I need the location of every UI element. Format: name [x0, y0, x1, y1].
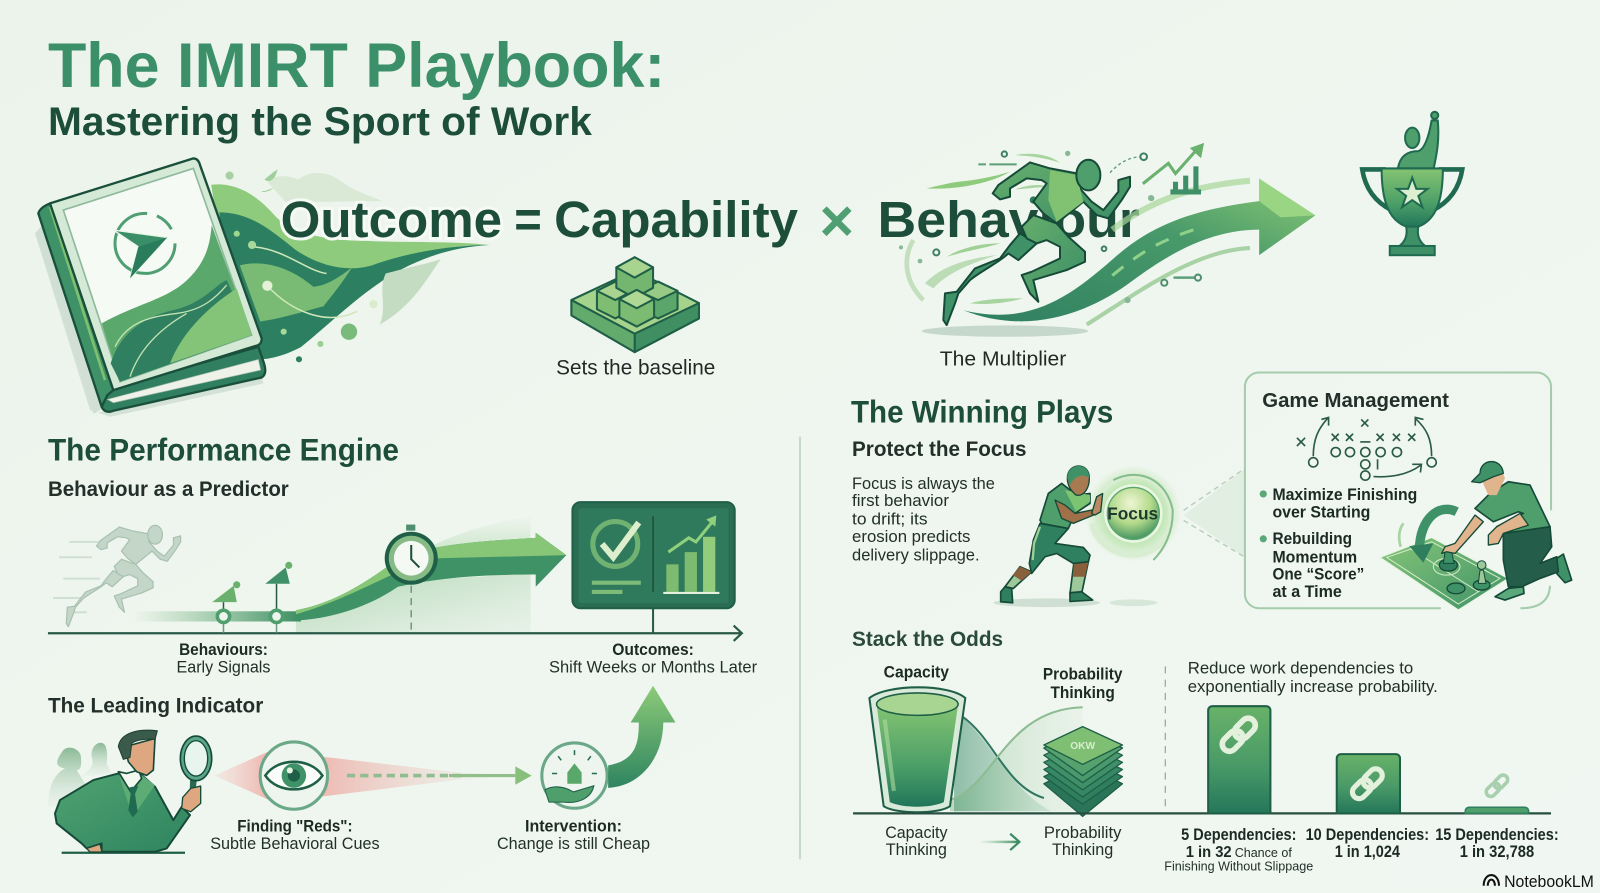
heading: Game Management	[1262, 390, 1449, 412]
results dashboard	[572, 502, 735, 633]
subheading: Behaviour as a Predictor	[48, 477, 289, 501]
arrow: thinking shift	[980, 834, 1019, 850]
label: 10 dependencies: 1 in 1,024	[1335, 843, 1400, 861]
formula: Capability	[554, 191, 799, 248]
label: behaviours: Early Signals	[177, 659, 270, 677]
book	[35, 158, 265, 417]
label: probability thinking: Thinking	[1051, 684, 1115, 702]
text: reduce dependencies: exponentially increase probability.	[1188, 677, 1438, 696]
label: intervention: Change is still Cheap	[497, 835, 650, 853]
multiply sign: ×	[819, 187, 854, 254]
icon: player pushing focus orb	[993, 465, 1182, 607]
icon: playbook with flowing ribbon	[35, 158, 490, 417]
arm	[1055, 500, 1093, 523]
flow: finding reds to intervention	[214, 686, 676, 809]
ribbon	[211, 169, 490, 362]
label: 10 dependencies	[1306, 826, 1429, 861]
icon: glass	[869, 687, 965, 812]
icon: trophy	[1362, 112, 1462, 255]
text: focus description: first behavior	[852, 491, 949, 510]
label: 5 dependencies: Finishing Without Slippage	[1164, 858, 1313, 873]
bar: 15 dependencies	[1465, 773, 1529, 813]
icon: capability blocks	[571, 257, 699, 352]
label: probability thinking result: Thinking	[1052, 841, 1113, 859]
panel: the performance engine	[48, 431, 758, 853]
formula: Outcome	[281, 191, 502, 248]
bullet: maximize finishing: Maximize Finishing	[1272, 486, 1417, 504]
front leg	[1022, 215, 1085, 302]
label: intervention	[497, 818, 650, 853]
bar chart: dependencies	[1208, 706, 1529, 813]
panel: stack the odds	[852, 627, 1559, 873]
caption: the multiplier: The Multiplier	[940, 348, 1067, 370]
bullet: rebuilding momentum: Momentum	[1272, 548, 1357, 566]
subheading: leading indicator: The Leading Indicator	[48, 693, 263, 717]
label: behaviours: Behaviours:	[179, 641, 268, 659]
icon: stack of sheets: OKW	[1070, 741, 1095, 752]
label: 5 dependencies: 1 in 32	[1186, 844, 1232, 861]
head	[1482, 470, 1505, 495]
text: focus description: to drift; its	[852, 510, 928, 529]
label: capacity thinking: Thinking	[886, 841, 947, 859]
label: outcomes: Shift Weeks or Months Later	[549, 659, 758, 677]
icon: sprinter with arrow	[899, 143, 1315, 337]
text: focus description: delivery slippage.	[852, 545, 980, 564]
text: reduce dependencies	[1188, 659, 1438, 696]
label: 5 dependencies: Chance of	[1235, 845, 1292, 860]
label: outcomes	[549, 641, 758, 677]
connector cone	[1184, 468, 1245, 557]
bar: 5 dependencies	[1208, 706, 1270, 813]
runner	[899, 151, 1154, 337]
icon: player pushing focus orb: Focus	[1107, 503, 1158, 523]
label: probability thinking result	[1044, 824, 1122, 859]
play diagram	[1297, 417, 1436, 480]
label: capacity: Capacity	[884, 664, 949, 682]
panel: game management	[1245, 373, 1572, 610]
torso	[1040, 483, 1090, 528]
timeline chart	[48, 502, 742, 641]
icon: stack of sheets	[1044, 727, 1122, 816]
back leg	[943, 233, 1037, 325]
background people	[48, 743, 112, 807]
text: focus description: erosion predicts	[852, 527, 970, 546]
big arrow	[963, 143, 1315, 325]
label: behaviours	[177, 641, 270, 677]
bullet: rebuilding momentum	[1260, 530, 1364, 601]
label: finding reds: Subtle Behavioral Cues	[210, 835, 380, 853]
heading: The Winning Plays	[851, 394, 1113, 430]
ghost runner	[53, 525, 181, 627]
label: probability thinking result: Probability	[1044, 824, 1122, 842]
formula: =	[514, 191, 542, 248]
text: reduce dependencies: Reduce work dependencies to	[1188, 659, 1413, 678]
heading: Stack the Odds	[852, 627, 1003, 651]
front leg	[1070, 562, 1088, 593]
capacity to probability curves	[950, 707, 1083, 811]
legs	[1495, 587, 1524, 600]
panel: the winning plays	[851, 373, 1572, 610]
text: focus description: Focus is always the	[852, 474, 995, 493]
label: probability thinking	[1043, 666, 1122, 702]
stopwatch	[385, 525, 438, 585]
shirt	[1475, 482, 1550, 533]
pants	[1029, 523, 1090, 573]
behaviour markers	[212, 562, 292, 623]
bullet: rebuilding momentum: at a Time	[1272, 583, 1342, 601]
notebooklm logo: NotebookLM	[1504, 873, 1594, 891]
formula	[281, 187, 1140, 254]
bullet: rebuilding momentum: Rebuilding	[1272, 530, 1352, 548]
back leg	[1005, 567, 1032, 588]
label: 15 dependencies: 1 in 32,788	[1460, 843, 1534, 861]
bullet: maximize finishing: over Starting	[1272, 503, 1370, 521]
caption: sets the baseline: Sets the baseline	[556, 356, 715, 380]
label: 5 dependencies	[1164, 826, 1313, 873]
arms	[1442, 515, 1483, 553]
axis	[853, 812, 1551, 814]
text: focus description	[852, 474, 995, 564]
icon: coach with tactic board	[1380, 462, 1572, 610]
label: capacity thinking: Capacity	[885, 824, 948, 842]
label: 10 dependencies: 10 Dependencies:	[1306, 826, 1429, 844]
label: finding reds	[210, 818, 380, 853]
tactic board	[1380, 537, 1508, 610]
label: capacity thinking	[885, 824, 948, 859]
axis	[48, 626, 742, 641]
title	[48, 31, 665, 144]
torso and arms	[993, 162, 1130, 223]
bar: 10 dependencies	[1337, 754, 1400, 813]
icon: manager with magnifier	[48, 730, 212, 853]
bullet: maximize finishing	[1260, 486, 1417, 521]
growth arrow	[608, 686, 676, 788]
heading: The Performance Engine	[48, 431, 399, 467]
formula: Behaviour	[878, 191, 1140, 248]
pieces	[1439, 559, 1457, 571]
subtitle: Mastering the Sport of Work	[48, 100, 593, 144]
icon: intervention	[542, 743, 607, 808]
title: The IMIRT Playbook:	[48, 31, 665, 101]
label: 15 dependencies	[1435, 826, 1559, 861]
icon: eye	[260, 742, 328, 809]
label: intervention: Intervention:	[525, 818, 622, 836]
label: finding reds: Finding "Reds":	[237, 818, 353, 836]
label: probability thinking: Probability	[1043, 666, 1122, 684]
label: outcomes: Outcomes:	[612, 641, 694, 659]
label: 5 dependencies: 5 Dependencies:	[1181, 826, 1296, 844]
subheading: protect the focus: Protect the Focus	[852, 437, 1027, 461]
bullet: rebuilding momentum: One “Score”	[1272, 566, 1364, 584]
label: 15 dependencies: 15 Dependencies:	[1435, 826, 1559, 844]
